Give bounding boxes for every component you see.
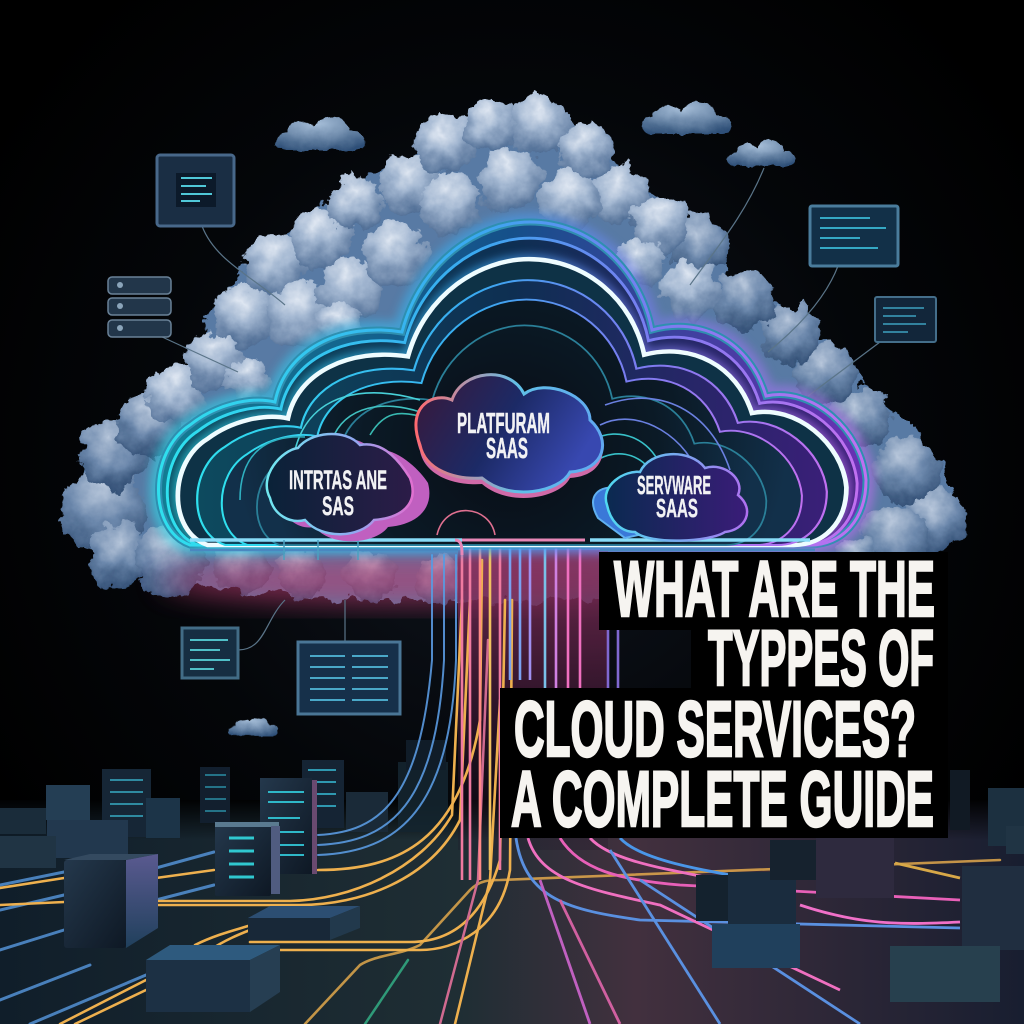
neon rail lines from cloud to floor bbox=[462, 545, 618, 880]
label: INTRTAS ANE bbox=[289, 465, 387, 495]
server: flat front bbox=[146, 945, 280, 1012]
floating panel: below cloud centre bbox=[298, 642, 400, 714]
server: front centre bbox=[215, 822, 280, 896]
floating panel: top left bbox=[157, 155, 234, 226]
glow bbox=[158, 222, 866, 545]
data lines: left side on floor bbox=[0, 555, 1000, 1024]
left cloud: Infrastructure SaaS: SAS bbox=[322, 491, 354, 521]
horizontal rail bbox=[190, 538, 810, 542]
right cloud: Software SaaS: SAAS bbox=[656, 493, 698, 523]
floating panel: right upper bbox=[810, 206, 898, 266]
floating panel: right lower bbox=[875, 297, 936, 342]
server: flat low bbox=[248, 906, 360, 940]
floating panel: below cloud left bbox=[182, 628, 238, 678]
server: tall centre bbox=[260, 778, 317, 874]
background servers left bbox=[0, 740, 448, 868]
inner arcs bbox=[240, 393, 730, 535]
pink underglow bbox=[160, 556, 640, 604]
pink glow behind rails bbox=[458, 550, 608, 850]
connector lines bbox=[160, 168, 880, 650]
data lines: right side on floor bbox=[516, 838, 960, 1024]
server: right blocks bbox=[696, 838, 1024, 1002]
background servers right bbox=[950, 770, 1024, 854]
right cloud: Software SaaS bbox=[593, 454, 747, 541]
right cloud: Software SaaS: SERVWARE bbox=[637, 470, 711, 500]
server: large front left bbox=[64, 854, 158, 948]
small floating clouds bbox=[229, 102, 796, 736]
ground floor bbox=[0, 800, 1024, 1024]
label: PLATFURAM bbox=[457, 408, 550, 440]
server stack icon bbox=[108, 277, 171, 337]
centre cloud: Platform SaaS bbox=[416, 375, 603, 498]
large fluffy cloud bbox=[63, 95, 967, 604]
server block cluster bbox=[64, 778, 1024, 1012]
left cloud: Infrastructure SaaS bbox=[267, 434, 429, 541]
centre cloud: Platform SaaS: SAAS bbox=[486, 433, 528, 465]
title bbox=[500, 544, 948, 843]
main neon cloud bbox=[158, 222, 866, 560]
